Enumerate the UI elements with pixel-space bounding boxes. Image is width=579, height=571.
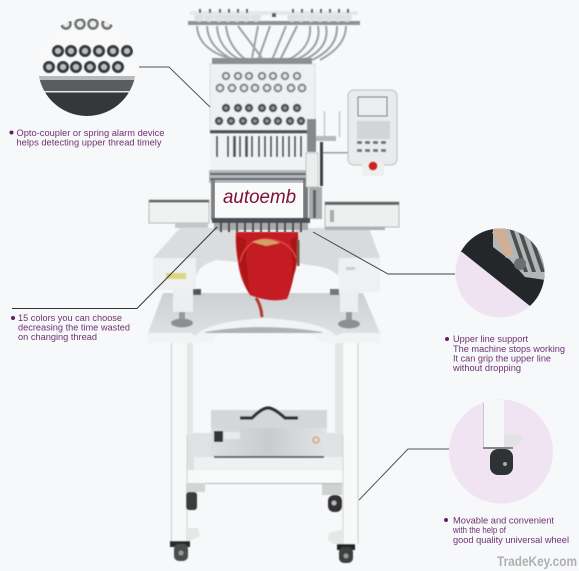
note: universal wheel: with the help of	[452, 525, 506, 535]
note: 15 colors: 15 colors you can choose	[18, 313, 122, 323]
note: universal wheel: good quality universal wheel	[453, 535, 569, 545]
note: 15 colors: on changing thread	[18, 332, 97, 342]
note: opto-coupler: Opto-coupler or spring alarm device	[16, 128, 164, 138]
detail circle: thread tension	[38, 18, 136, 118]
tension knobs row 2	[217, 85, 305, 91]
handle	[240, 408, 298, 418]
side mechanism	[306, 153, 318, 187]
note: upper line support: Upper line support	[453, 334, 529, 344]
stop button	[362, 162, 384, 176]
leader lines	[12, 67, 455, 500]
logo panel	[215, 183, 303, 218]
note: universal wheel	[444, 516, 569, 545]
note: universal wheel: Movable and convenient	[453, 516, 555, 526]
adjustable feet	[171, 289, 360, 328]
detail circle: upper line support	[455, 226, 545, 318]
presser bar housing	[209, 170, 309, 183]
detail circle: universal wheel	[449, 400, 553, 504]
machine stand	[148, 228, 380, 563]
knob row 2	[44, 62, 122, 72]
power box	[211, 408, 327, 458]
brand text: autoemb	[223, 186, 296, 208]
base frame	[153, 228, 380, 312]
thread rail and tubes	[188, 9, 360, 60]
embroidered red cap	[236, 232, 300, 317]
note: upper line support: without dropping	[452, 363, 521, 373]
control panel	[348, 90, 397, 176]
note: opto-coupler	[10, 128, 164, 148]
knob row 1	[54, 46, 132, 56]
note: upper line support: The machine stops working	[453, 344, 565, 354]
tension knobs row 4	[216, 118, 304, 124]
note: 15 colors	[11, 313, 130, 342]
front casters	[170, 541, 355, 563]
lower shelf	[186, 433, 343, 484]
note: upper line support	[445, 334, 565, 373]
rail	[188, 21, 360, 25]
tension knobs row 3	[223, 105, 300, 111]
note: opto-coupler: helps detecting upper thread timely	[16, 138, 162, 148]
note: upper line support: It can grip the upper line	[453, 354, 551, 364]
table top	[148, 293, 380, 343]
needle bar	[212, 218, 310, 232]
thread tubes	[197, 26, 346, 60]
thread take-up section	[210, 130, 310, 171]
inner casters	[186, 483, 342, 512]
right leg	[328, 343, 358, 544]
tension knobs row 1	[223, 73, 300, 79]
note: 15 colors: decreasing the time wasted	[18, 322, 130, 332]
embroidery head	[209, 58, 350, 220]
machine side arms	[149, 200, 399, 230]
top knobs	[62, 20, 112, 28]
left leg	[171, 343, 200, 542]
